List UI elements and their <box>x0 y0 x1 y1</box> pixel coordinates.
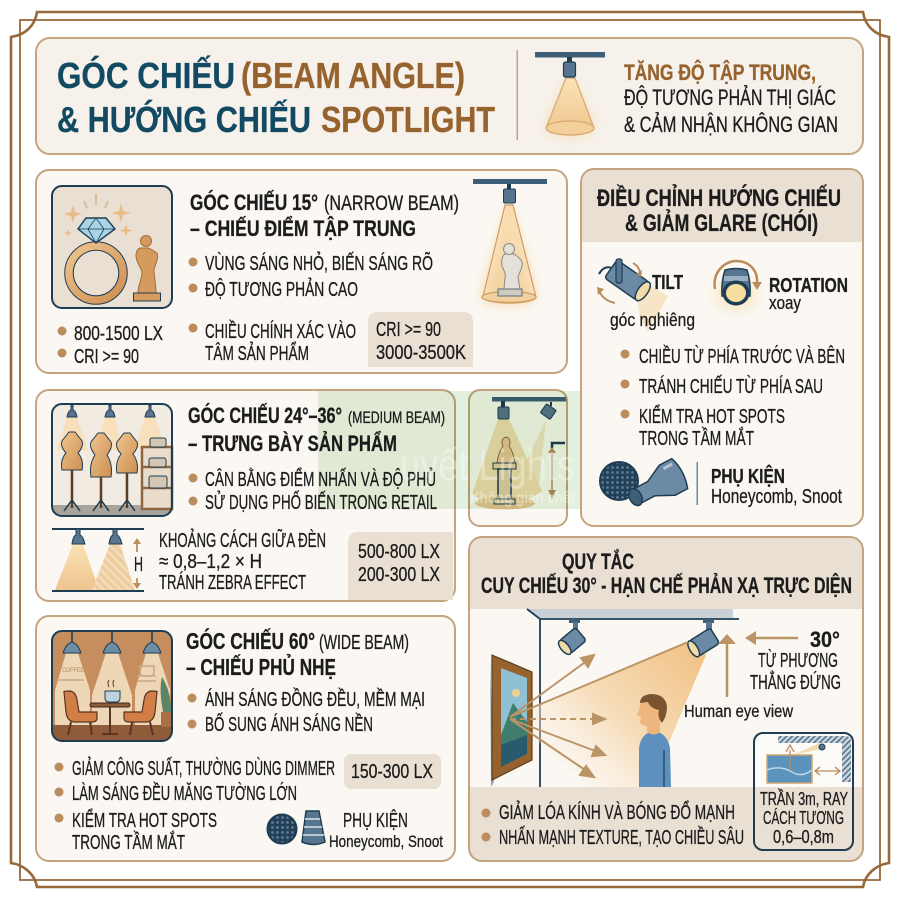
watermark <box>318 391 580 509</box>
main title: GÓC CHIẾU <box>57 54 235 96</box>
heading: narrow beam: – CHIẾU ĐIỂM TẬP TRUNG <box>190 216 416 241</box>
text: rotation label: xoay <box>769 293 801 313</box>
header tagline: TĂNG ĐỘ TẬP TRUNG, <box>624 60 816 85</box>
icon: mannequins in retail display <box>52 404 172 516</box>
inset: ceiling and rail distance: TRẦN 3m, RAY <box>760 788 848 809</box>
heading: narrow beam: GÓC CHIẾU 15° <box>190 190 318 215</box>
bullets: medium beam properties: SỬ DỤNG PHỐ BIẾN TRONG RETAIL <box>205 490 437 514</box>
text: tilt label: góc nghiêng <box>610 310 695 330</box>
text: small accessories label: PHỤ KIỆN <box>343 809 408 832</box>
inset: ceiling and rail distance <box>754 733 853 850</box>
text: small accessories label <box>329 809 443 851</box>
inset: ceiling and rail distance: CÁCH TƯƠNG <box>763 807 844 828</box>
text: tilt label: TILT <box>652 272 683 294</box>
inset: ceiling and rail distance: 0,6–0,8m <box>773 826 834 847</box>
icon: right track spotlight <box>686 619 720 659</box>
panel: narrow beam 15 degrees <box>36 170 567 373</box>
bullets: wide beam usage: KIỂM TRA HOT SPOTS <box>72 809 217 832</box>
heading: medium beam <box>188 403 445 456</box>
chip: CRI and colour temperature: 3000-3500K <box>376 341 466 364</box>
icon: viewer <box>637 694 671 787</box>
heading: medium beam: – TRƯNG BÀY SẢN PHẨM <box>188 431 397 456</box>
heading: medium beam: (MEDIUM BEAM) <box>348 409 445 427</box>
panel: 30 degree rule <box>469 537 863 861</box>
bullets: wide beam usage: TRONG TẦM MẮT <box>72 830 185 854</box>
bullets: benefits: NHẤN MẠNH TEXTURE, TẠO CHIỀU SÂU <box>499 826 744 849</box>
bullets: narrow beam properties: VÙNG SÁNG NHỎ, BIẾN SÁNG RÕ <box>205 251 433 275</box>
bullets: narrow beam properties: ĐỘ TƯƠNG PHẢN CAO <box>205 278 358 301</box>
watermark: Không gian chất <box>470 490 576 507</box>
bullets: aiming tips: TRONG TẦM MẮT <box>639 426 754 450</box>
bullets: benefits <box>482 800 744 849</box>
icon: cafe interior: COFFEE <box>62 668 84 674</box>
header tagline <box>624 60 838 137</box>
text: accessories label <box>711 464 842 508</box>
heading: adjust direction: & GIẢM GLARE (CHÓI) <box>625 208 818 237</box>
heading: adjust direction <box>597 183 841 237</box>
icon: rotation spotlight <box>714 261 762 311</box>
text: rotation label <box>769 275 848 313</box>
chip: medium beam lux: 200-300 LX <box>358 563 440 586</box>
chip: wide beam lux: 150-300 LX <box>351 760 433 783</box>
diagram: spacing between spotlights <box>52 529 144 591</box>
text: spacing rule: TRÁNH ZEBRA EFFECT <box>159 571 306 594</box>
text: spacing rule: KHOẢNG CÁCH GIỮA ĐÈN <box>159 529 326 552</box>
bullets: wide beam usage <box>54 757 335 854</box>
icon: framed painting <box>490 655 532 787</box>
bullets: narrow beam properties <box>188 251 433 301</box>
panel: medium beam 24-36 degrees <box>36 390 455 601</box>
chip: medium beam lux <box>348 532 453 600</box>
text: rotation label: ROTATION <box>769 275 848 297</box>
bullets: narrow beam lux <box>58 322 163 368</box>
bullet: aim accuracy <box>188 320 356 365</box>
bullets: wide beam usage: GIẢM CÔNG SUẤT, THƯỜNG DÙNG DIMMER <box>72 757 335 780</box>
bullets: wide beam properties <box>188 687 425 736</box>
heading: wide beam <box>186 627 409 680</box>
heading: narrow beam: (NARROW BEAM) <box>324 192 459 215</box>
text: human eye view: Human eye view <box>684 701 793 721</box>
main title: (BEAM ANGLE) <box>241 55 465 96</box>
heading: 30 degree rule <box>481 549 852 598</box>
text: accessories label: PHỤ KIỆN <box>711 464 785 488</box>
text: spacing rule <box>159 529 326 594</box>
main title: SPOTLIGHT <box>321 99 495 140</box>
bullets: narrow beam lux: CRI >= 90 <box>74 345 139 368</box>
heading: 30 degree rule: QUY TẮC <box>562 549 634 574</box>
chip: medium beam lux: 500-800 LX <box>358 540 440 563</box>
arrows: reflected light <box>510 642 688 777</box>
bullets: wide beam usage: LÀM SÁNG ĐỀU MĂNG TƯỜNG LỚN <box>72 782 297 805</box>
bullets: narrow beam lux: 800-1500 LX <box>74 322 163 345</box>
text: tilt label <box>610 272 695 330</box>
arrow: 30 degree pointer <box>745 631 798 645</box>
bullets: medium beam properties <box>188 467 437 514</box>
bullets: wide beam properties: ÁNH SÁNG ĐỒNG ĐỀU, MỀM MẠI <box>205 687 425 711</box>
text: accessories label: Honeycomb, Snoot <box>711 485 842 508</box>
main title: & HƯỚNG CHIẾU <box>57 98 311 140</box>
panel: pedestal display with two spotlights <box>469 390 567 526</box>
bullets: aiming tips <box>620 345 845 450</box>
icon: tilt spotlight <box>597 259 668 332</box>
chip: CRI and colour temperature: CRI >= 90 <box>376 318 441 341</box>
text: 30 degree label: THẲNG ĐỨNG <box>750 671 841 694</box>
panel: wide beam 60 degrees <box>36 616 455 861</box>
heading: wide beam: (WIDE BEAM) <box>319 632 409 654</box>
arrow: vertical reference <box>718 634 736 697</box>
bullets: aiming tips: KIỂM TRA HOT SPOTS <box>639 405 785 428</box>
chip: wide beam lux <box>344 754 441 789</box>
bullets: wide beam properties: BỐ SUNG ÁNH SÁNG NỀN <box>205 712 373 736</box>
icon: cafe interior <box>52 631 172 741</box>
icon: statue under narrow spotlight <box>473 179 547 303</box>
heading: medium beam: GÓC CHIẾU 24°–36° <box>188 403 342 428</box>
watermark: uyết Lights <box>400 441 575 490</box>
icon: honeycomb and snoot accessories <box>600 457 690 515</box>
bullets: benefits: GIẢM LÓA KÍNH VÀ BÓNG ĐỔ MẠNH <box>499 800 735 824</box>
diagram: spacing between spotlights: H <box>134 553 143 576</box>
header panel <box>36 38 863 154</box>
icon: ring and statuette <box>52 186 172 308</box>
bullet: aim accuracy: TÂM SẢN PHẨM <box>205 342 309 365</box>
heading: narrow beam <box>190 190 459 241</box>
bullets: medium beam properties: CÂN BẰNG ĐIỂM NHẤN VÀ ĐỘ PHỦ <box>205 467 436 491</box>
heading: wide beam: GÓC CHIẾU 60° <box>186 627 315 654</box>
panel: adjust direction and reduce glare <box>581 169 863 526</box>
main title <box>57 54 495 140</box>
chip: CRI and colour temperature <box>368 312 473 367</box>
icon: track spotlight <box>535 52 605 135</box>
text: spacing rule: ≈ 0,8–1,2 × H <box>159 550 262 573</box>
diagram: wall, spotlight, viewer and painting <box>490 609 841 787</box>
bullet: aim accuracy: CHIỀU CHÍNH XÁC VÀO <box>205 320 356 343</box>
text: 30 degree label: TỪ PHƯƠNG <box>758 649 838 672</box>
text: 30 degree label: 30° <box>810 627 840 652</box>
heading: wide beam: – CHIẾU PHỦ NHẸ <box>186 652 336 680</box>
text: 30 degree label <box>750 627 841 694</box>
icon: left track spotlight <box>556 619 586 656</box>
text: small accessories label: Honeycomb, Snoot <box>329 832 443 851</box>
icon: small honeycomb and snoot <box>268 811 325 844</box>
